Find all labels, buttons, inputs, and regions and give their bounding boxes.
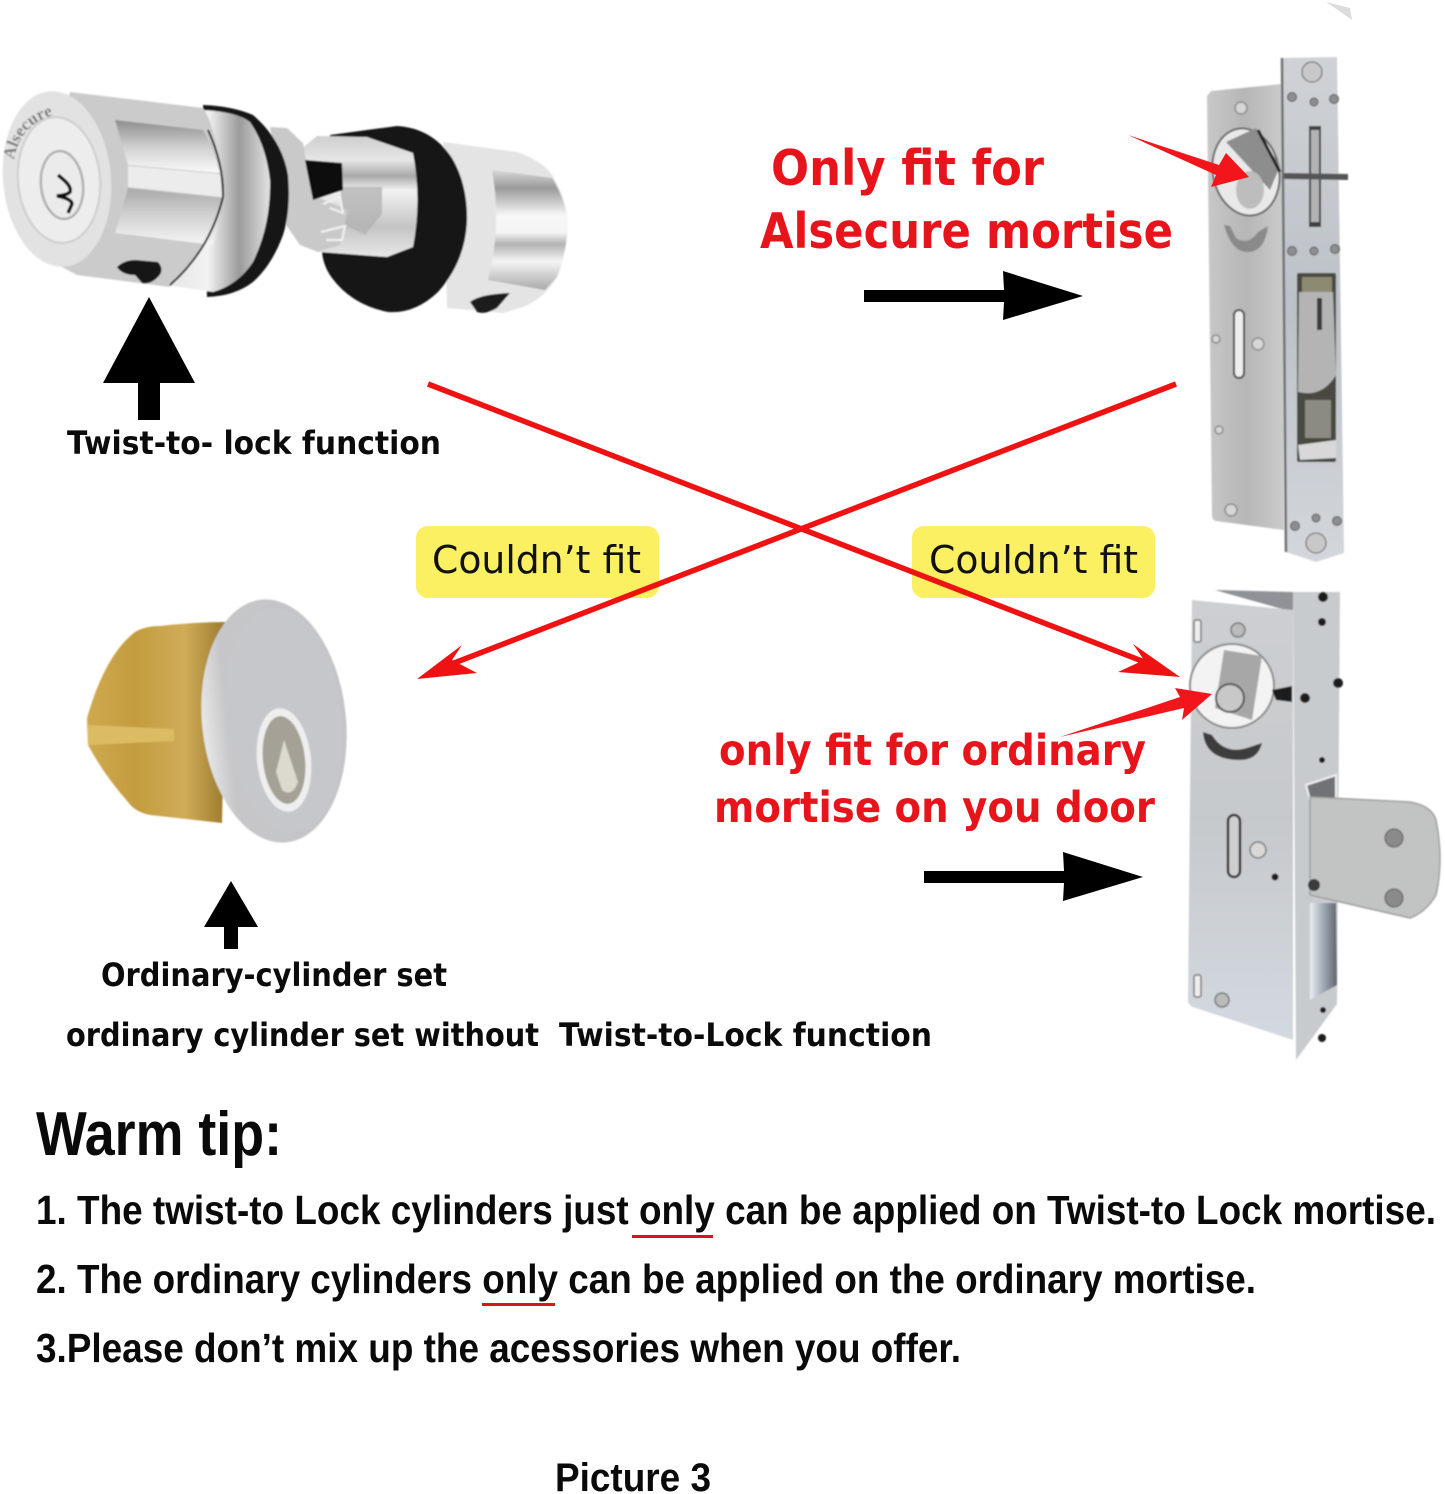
keyway: [57, 175, 72, 213]
rear knob flutes: [488, 170, 568, 290]
callout: couldn't fit right: Couldn’t fit: [929, 538, 1138, 582]
chrome face: [215, 603, 353, 837]
cylinder opening: [1190, 644, 1274, 728]
black centre block: [305, 160, 343, 200]
faceplate dark edge: [1282, 58, 1286, 552]
headline: only fit for Alsecure mortise: Only fit for: [771, 140, 1045, 197]
red pointer: lower mortise: [1060, 688, 1212, 737]
oblong slot: [1228, 815, 1240, 877]
face of knob: [0, 87, 118, 271]
tip 3: 3.Please don’t mix up the acessories when you offer.: [36, 1325, 961, 1371]
chrome rim: [190, 592, 358, 850]
hook bolt: [1298, 292, 1336, 393]
line to ordinary mortise: [428, 384, 1180, 677]
label: ordinary cylinder without twist-to-lock: Twist-to-Lock function: [559, 1016, 932, 1054]
round cylinder opening: [1205, 122, 1287, 222]
black ring front: [203, 105, 289, 297]
dark holes: [1272, 592, 1343, 1042]
crescent slot: [1224, 225, 1268, 252]
rear knob slot: [470, 293, 510, 313]
tip 2: 2. The ordinary cylinders only can be applied on the ordinary mortise.: [36, 1256, 1256, 1302]
plate screws: [1288, 62, 1342, 553]
ordinary cylinder photo: [87, 592, 358, 850]
faceplate: [1293, 592, 1340, 1060]
translucent connector: [270, 127, 348, 252]
callout: couldn't fit right: [912, 526, 1155, 598]
bolt pivot: [1308, 879, 1320, 891]
callout: couldn't fit left: [416, 526, 659, 598]
black arrow to ordinary mortise: [924, 852, 1143, 901]
label: ordinary cylinder without twist-to-lock: [66, 1016, 932, 1054]
chrome collar: [167, 110, 270, 292]
brass body: [87, 622, 226, 823]
upper bolt cut-out: [1306, 775, 1336, 800]
faceplate: [1282, 57, 1344, 562]
key ring: [252, 705, 316, 815]
headline: only fit for ordinary mortise: only fit for ordinary: [719, 726, 1146, 776]
keyway: [276, 740, 298, 793]
ordinary mortise photo: [1188, 590, 1440, 1060]
key plug: [259, 714, 309, 806]
headline: only fit for Alsecure mortise: [760, 140, 1173, 260]
crescent slot: [1203, 732, 1262, 760]
image artifact top right: [1326, 2, 1352, 20]
slits and holes: [1194, 620, 1266, 1007]
line to ordinary cylinder: [417, 384, 1176, 679]
red pointer: top mortise: [1128, 135, 1249, 187]
black arrow to Alsecure mortise: [864, 271, 1083, 320]
plate slot: [1309, 126, 1321, 227]
oblong key slot: [1234, 310, 1244, 378]
twist-to-lock cylinder set photo: [2, 91, 568, 314]
callout: couldn't fit left: Couldn’t fit: [432, 538, 641, 582]
main fluted knob body: [30, 92, 223, 287]
Alsecure mortise photo: [1205, 57, 1348, 562]
small holes: [1212, 102, 1264, 516]
tip list: [36, 1187, 1436, 1371]
up arrow: ordinary cylinder: [204, 881, 258, 949]
lower bolt channel: [1310, 903, 1337, 1000]
rear translucent cylinder: [300, 136, 418, 257]
headline: only fit for ordinary mortise: [714, 726, 1156, 833]
actuator pin: [1284, 173, 1348, 180]
rear knob body: [443, 142, 568, 313]
underline: only, tip 2: [482, 1303, 555, 1306]
headline: only fit for ordinary mortise: mortise on you door: [714, 783, 1156, 833]
cylinder window: [340, 187, 382, 235]
underline: only, tip 1: [632, 1235, 713, 1238]
hook bolt window: [1297, 273, 1336, 462]
brass groove: [87, 725, 174, 745]
twist slot: [117, 260, 162, 283]
flute highlights: [115, 120, 222, 245]
cam: [1216, 684, 1244, 712]
black rubber disc: [322, 126, 467, 312]
label: twist-to-lock function: Twist-to- lock function: [67, 424, 441, 462]
mortise case: [1207, 84, 1284, 530]
collar seam: [170, 130, 223, 285]
up arrow: twist-to-lock: [103, 297, 195, 420]
headline: only fit for Alsecure mortise: Alsecure mortise: [760, 203, 1173, 260]
warm tip heading: Warm tip:: [36, 1100, 282, 1169]
key tail pieces: [321, 197, 345, 240]
brand text on face: Alsecure: [4, 108, 52, 160]
deadbolt: [1310, 797, 1440, 918]
case: [1188, 600, 1293, 1040]
label: ordinary cylinder without twist-to-lock: ordinary cylinder set without: [66, 1016, 539, 1054]
top inner edge: [1215, 590, 1293, 612]
label: ordinary-cylinder set: Ordinary-cylinder set: [101, 956, 447, 994]
red cross lines with arrowheads: [417, 384, 1180, 679]
bolt screws: [1385, 829, 1403, 907]
